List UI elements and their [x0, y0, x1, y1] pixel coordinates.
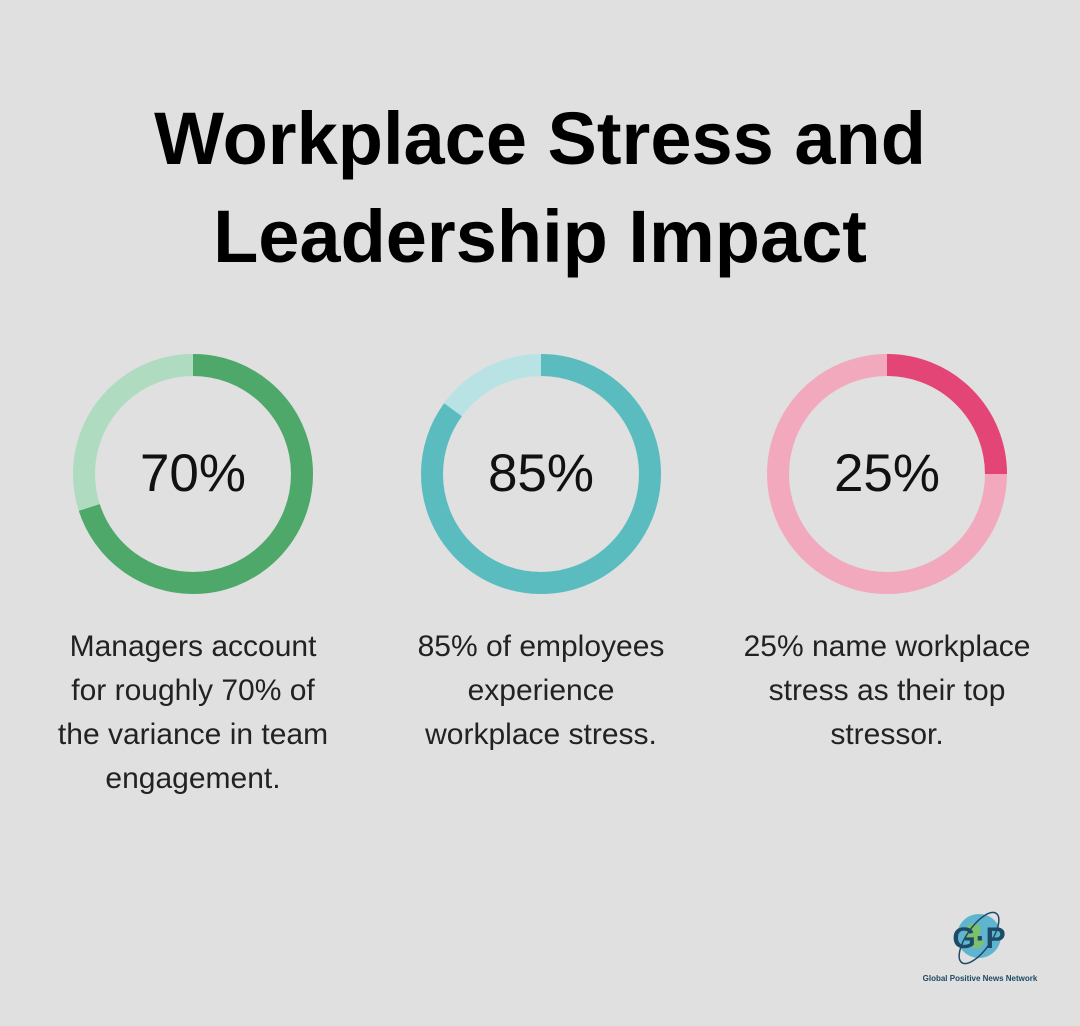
description: 85%: 85% of employees	[418, 630, 664, 663]
title: Workplace Stress and	[154, 97, 926, 180]
description: 70%: engagement.	[105, 762, 281, 795]
donut: 70%: 70%	[140, 444, 246, 503]
donut: 25%: 25%	[834, 444, 940, 503]
description: 85%	[418, 630, 664, 751]
description: 25%: stressor.	[830, 718, 944, 751]
description: 70%: for roughly 70% of	[71, 674, 315, 707]
logo: Global Positive News Network	[923, 974, 1037, 983]
description: 85%: workplace stress.	[425, 718, 657, 751]
description: 25%: stress as their top	[769, 674, 1005, 707]
title: Leadership Impact	[213, 195, 867, 278]
description: 70%: the variance in team	[58, 718, 328, 751]
description: 25%: 25% name workplace	[744, 630, 1030, 663]
description: 70%	[58, 630, 328, 795]
description: 85%: experience	[468, 674, 614, 707]
title	[154, 97, 926, 278]
donut: 85%: 85%	[488, 444, 594, 503]
logo	[923, 912, 1038, 983]
donut: 85%	[421, 354, 661, 594]
description: 25%	[744, 630, 1030, 751]
logo: G·P	[952, 922, 1006, 955]
donut: 70%	[73, 354, 313, 594]
donut: 25%	[767, 354, 1007, 594]
description: 70%: Managers account	[70, 630, 316, 663]
